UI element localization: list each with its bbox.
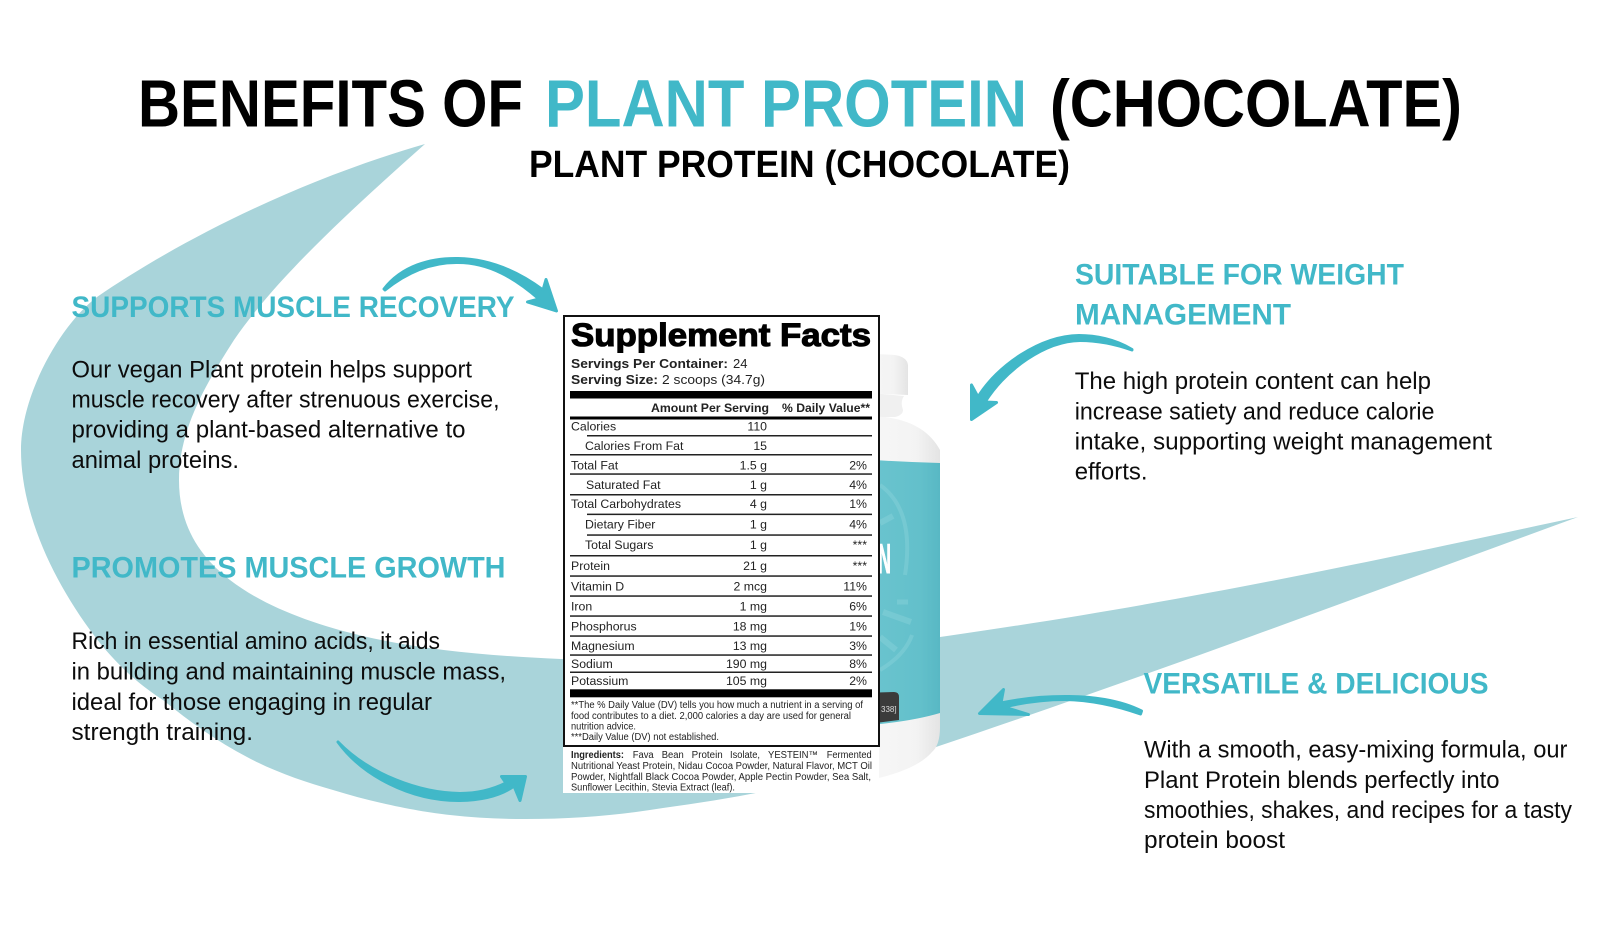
servings per container: Servings Per Container: [571,356,728,371]
nutrition rows: 4% [849,478,867,492]
nutrition rows: Calories [571,420,616,434]
nutrition rows: Calories From Fat [585,439,684,453]
ingredients: Protein [692,750,723,761]
bottle cap [860,353,908,395]
product bottle: N [878,535,891,582]
body text: protein boost [1144,827,1285,854]
nutrition rows: 1 g [750,478,767,492]
title: (CHOCOLATE) [1050,66,1462,142]
nutrition rows: 1% [849,497,867,511]
label box [564,316,879,746]
nutrition rows: 190 mg [726,657,767,671]
nutrition rows: 1 g [750,538,767,552]
nutrition rows: 15 [753,439,767,453]
heading: SUITABLE FOR WEIGHT [1075,258,1404,291]
nutrition rows: 2% [849,458,867,472]
body text: ideal for those engaging in regular [72,689,432,716]
nutrition rows: 3% [849,639,867,653]
swoosh background shape [21,144,1578,819]
nutrition rows: 8% [849,657,867,671]
panel: supports muscle recovery [72,291,514,474]
bottle teal label [860,459,940,726]
body text [72,628,506,746]
serving size: 2 scoops (34.7g) [662,372,765,387]
nutrition rows: Phosphorus [571,620,637,634]
panel: suitable for weight management [1075,258,1492,485]
nutrition rows: *** [853,538,867,552]
body text [1144,737,1572,854]
ingredients: Bean [662,750,684,761]
body text: efforts. [1075,458,1148,485]
column headers [651,401,870,415]
footnotes [571,700,863,743]
heading: SUPPORTS MUSCLE RECOVERY [72,291,514,324]
ingredients [571,750,872,794]
ingredients: YESTEIN™ [768,750,818,761]
nutrition rows: Protein [571,559,610,573]
ingredients: Fava [633,750,654,761]
nutrition rows: Iron [571,600,592,614]
label title: Supplement Facts [571,317,871,353]
heading: VERSATILE & DELICIOUS [1144,668,1488,701]
nutrition rows: 6% [849,600,867,614]
body text: smoothies, shakes, and recipes for a tasty [1144,797,1572,824]
nutrition rows: Magnesium [571,639,635,653]
title: BENEFITS OF [138,66,523,142]
arrow: weight management to bottle [972,336,1132,420]
body text: animal proteins. [72,447,239,474]
footnotes: food contributes to a diet. 2,000 calories a day are used for general [571,711,851,722]
body text: Plant Protein blends perfectly into [1144,767,1500,794]
ingredients: Ingredients: [571,750,624,761]
body text [72,356,500,474]
serving size [571,372,765,387]
nutrition rows: 4% [849,518,867,532]
nutrition rows: 11% [843,580,867,594]
ingredients: Isolate, [730,750,760,761]
nutrition rows: Total Sugars [585,538,653,552]
body text: increase satiety and reduce calorie [1075,398,1434,425]
body text: With a smooth, easy-mixing formula, our [1144,737,1567,764]
arrow: versatile to bottle [980,690,1142,714]
product bottle [860,353,940,782]
body text: Rich in essential amino acids, it aids [72,628,440,655]
body text: intake, supporting weight management [1075,428,1492,455]
nutrition rows: 4 g [750,497,767,511]
body text: in building and maintaining muscle mass, [72,659,506,686]
serving size: Serving Size: [571,372,658,387]
ingredients white backing [563,746,879,793]
nutrition rows: 18 mg [733,620,767,634]
column headers: Amount Per Serving [651,401,769,415]
ingredients: Fermented [827,750,872,761]
nutrition rows: 110 [747,420,767,434]
nutrition rows: 1.5 g [740,458,767,472]
heading: PROMOTES MUSCLE GROWTH [72,552,506,585]
panel: versatile and delicious [1144,668,1572,854]
title [138,66,1462,142]
panel: promotes muscle growth [72,552,506,746]
column headers: % Daily Value** [782,401,870,415]
nutrition rows: 1 mg [740,600,767,614]
body text [1075,368,1492,485]
badge text: 338] [881,705,897,714]
nutrition rows: 21 g [743,559,767,573]
body text: The high protein content can help [1075,368,1431,395]
nutrition rows: 13 mg [733,639,767,653]
nutrition rows: 2 mcg [734,580,767,594]
bottle neck [860,392,904,417]
bottle label dark badge [860,692,899,725]
nutrition rows: 1 g [750,518,767,532]
body text: strength training. [72,719,253,746]
nutrition rows: *** [853,559,867,573]
ingredients: Sunflower Lecithin, Stevia Extract (leaf). [571,782,735,794]
bottle label DNA decoration [880,485,912,670]
nutrition rows: 1% [849,620,867,634]
footnotes: **The % Daily Value (DV) tells you how much a nutrient in a serving of [571,700,863,711]
body text: providing a plant-based alternative to [72,417,465,444]
ingredients: Nutritional Yeast Protein, Nidau Cocoa Powder, Natural Flavor, MCT Oil [571,761,872,772]
nutrition rows: Total Carbohydrates [571,497,681,511]
footnotes: nutrition advice. [571,722,636,733]
nutrition rows [570,420,872,688]
nutrition rows: Dietary Fiber [585,518,655,532]
bottle body [860,416,940,782]
nutrition rows: Saturated Fat [586,478,661,492]
ingredients: Powder, Nightfall Black Cocoa Powder, Apple Pectin Powder, Sea Salt, [571,772,871,783]
nutrition rows: Vitamin D [571,580,624,594]
nutrition rows: 105 mg [726,674,767,688]
supplement facts label [563,316,879,794]
nutrition rows: 2% [849,674,867,688]
nutrition rows: Total Fat [571,458,619,472]
footnotes: ***Daily Value (DV) not established. [571,732,719,743]
body text: Our vegan Plant protein helps support [72,356,472,383]
servings per container: 24 [733,356,747,371]
subtitle: PLANT PROTEIN (CHOCOLATE) [529,144,1070,186]
arrow: muscle recovery to label [384,258,556,311]
heading [1075,258,1404,332]
body text: muscle recovery after strenuous exercise, [72,387,500,414]
nutrition rows: Potassium [571,674,628,688]
nutrition rows: Sodium [571,657,613,671]
heading: MANAGEMENT [1075,299,1291,332]
title: PLANT PROTEIN [545,66,1027,142]
arrow: muscle growth to label [338,742,526,801]
